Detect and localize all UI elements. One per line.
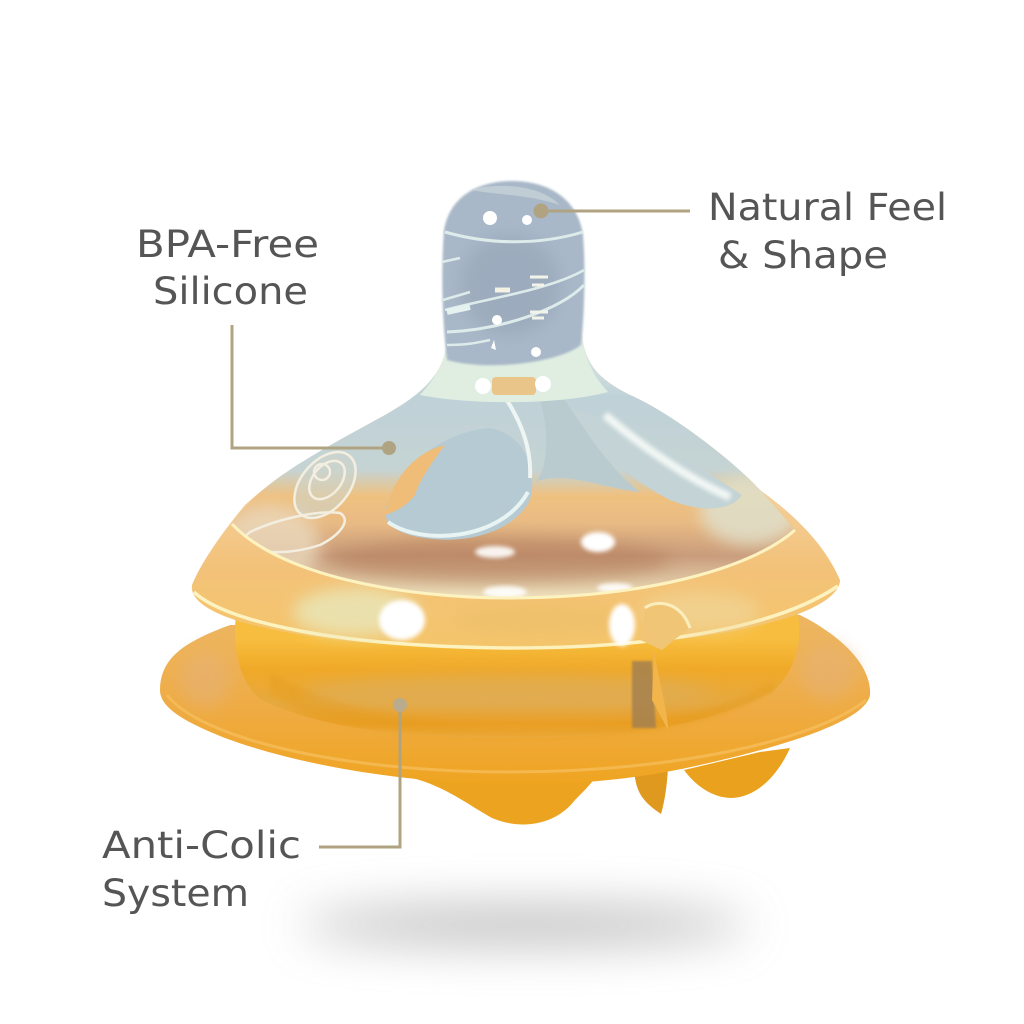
highlights (379, 600, 425, 640)
callout: Anti-Colic System (102, 698, 407, 915)
nipple neck (420, 335, 608, 402)
callout: BPA-Free Silicone: Silicone (153, 270, 308, 313)
skirt (192, 335, 840, 650)
callout: Natural Feel & Shape: & Shape (718, 234, 888, 277)
highlights (475, 546, 515, 558)
leader line (232, 325, 396, 455)
underside lobes (412, 748, 790, 824)
valve flap (640, 602, 690, 650)
embossed logo (246, 450, 357, 554)
ground shadow (300, 907, 750, 943)
callout: Anti-Colic System: System (102, 872, 249, 915)
callout: Natural Feel & Shape (534, 186, 947, 277)
dome lobes (385, 428, 532, 540)
base flange (160, 615, 870, 784)
label text: Anti-Colic (102, 824, 301, 867)
label text: BPA-Free (136, 223, 319, 266)
teat illustration (160, 181, 870, 824)
collar (235, 605, 799, 738)
callout: BPA-Free Silicone (136, 223, 396, 455)
nipple tip (442, 181, 584, 365)
leader line (534, 204, 690, 218)
dome (231, 338, 796, 600)
leader line (319, 698, 407, 847)
anti-colic valve (632, 648, 668, 730)
label text: Natural Feel (708, 186, 947, 229)
